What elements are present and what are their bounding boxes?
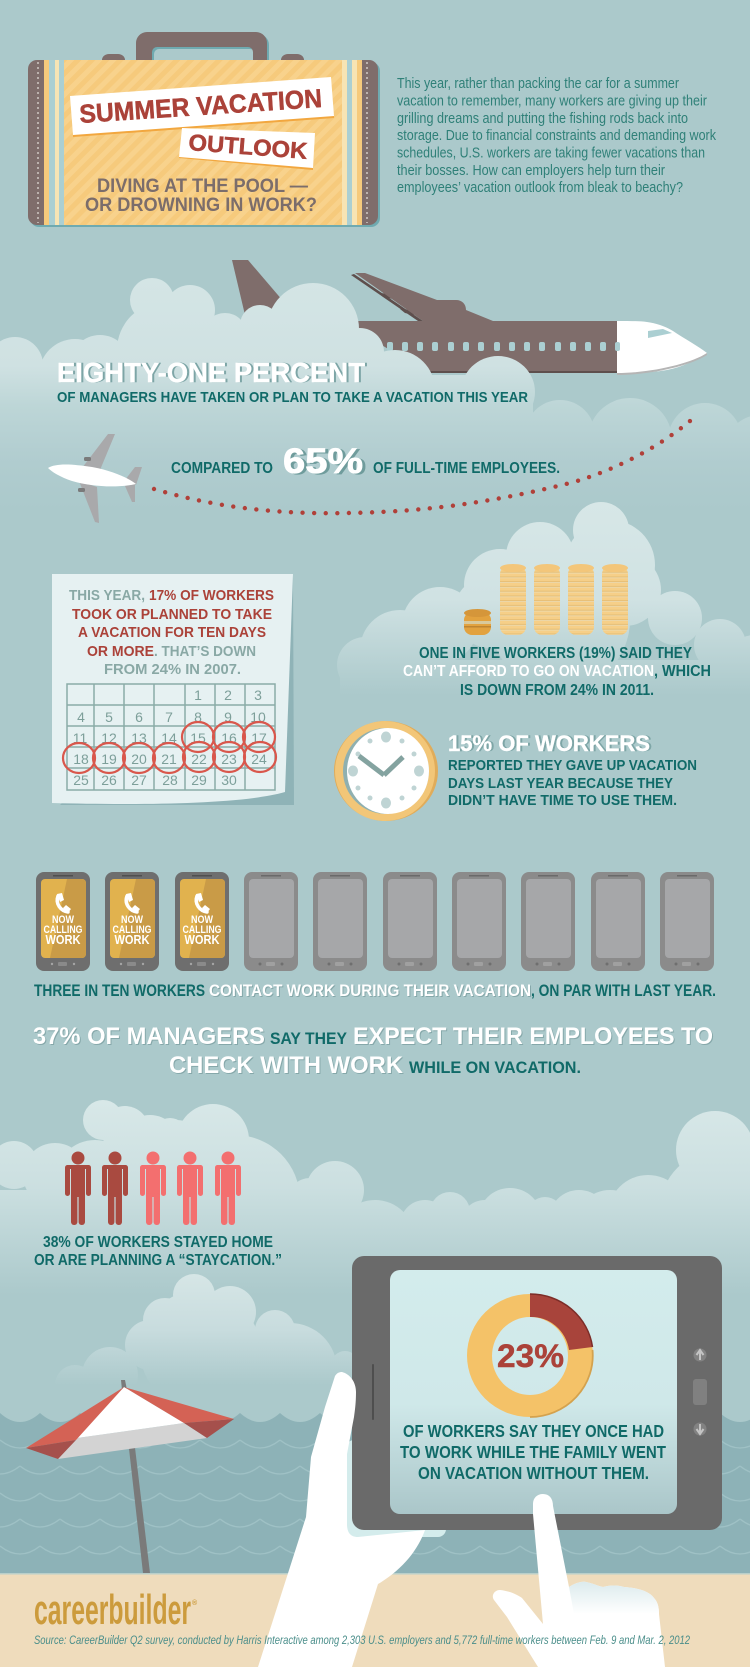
subheading: managers: OF MANAGERS HAVE TAKEN OR PLAN TO TAKE A VACATION THIS YEAR xyxy=(57,389,528,406)
calendar numbers: 3 xyxy=(254,687,262,703)
calendar numbers: 28 xyxy=(162,772,178,788)
intro paragraph: their bosses. How can employers help turn their xyxy=(397,163,665,179)
intro paragraph: vacation to remember, many workers are giving up their xyxy=(397,94,707,110)
phone: now calling work 2: CALLING xyxy=(112,924,152,936)
gray phones xyxy=(244,872,714,971)
text: 37% of managers: WHILE ON VACATION. xyxy=(409,1058,581,1077)
intro paragraph xyxy=(397,76,717,196)
tablet xyxy=(346,1256,722,1537)
calendar numbers: 29 xyxy=(191,772,207,788)
large airplane xyxy=(232,260,707,375)
phone: now calling work 2: NOW xyxy=(121,914,143,926)
calendar numbers: 25 xyxy=(73,772,89,788)
text: 15% of workers: 15% OF WORKERS xyxy=(448,731,650,756)
text: 15% of workers xyxy=(448,731,697,809)
calendar numbers: 16 xyxy=(221,730,237,746)
calendar numbers: 9 xyxy=(224,709,232,725)
heading: eighty-one percent: EIGHTY-ONE PERCENT xyxy=(57,357,365,388)
calendar numbers: 6 xyxy=(135,709,143,725)
intro paragraph: grilling dreams and putting the fishing rods back into xyxy=(397,111,688,127)
cloud: top banner xyxy=(0,278,750,530)
calendar numbers: 24 xyxy=(251,751,267,767)
text: three in ten workers: CONTACT WORK DURING THEIR VACATION xyxy=(209,982,531,1000)
phone: now calling work 2 xyxy=(105,872,159,971)
text: staycation: OR ARE PLANNING A “STAYCATION.” xyxy=(34,1252,282,1269)
calendar numbers: 5 xyxy=(105,709,113,725)
tablet text: TO WORK WHILE THE FAMILY WENT xyxy=(400,1442,666,1462)
comparison text: 65%: COMPARED TO xyxy=(171,460,273,477)
calendar numbers: 17 xyxy=(251,730,267,746)
comparison text: 65%: OF FULL-TIME EMPLOYEES. xyxy=(373,460,560,477)
calendar text: TOOK OR PLANNED TO TAKE xyxy=(72,606,272,623)
dark figures: 2 of 5 xyxy=(65,1152,128,1225)
dotted flight path xyxy=(154,421,690,513)
calendar numbers: 27 xyxy=(131,772,147,788)
cloud: behind coins xyxy=(337,502,750,700)
donut chart 23%: 23% xyxy=(497,1338,564,1374)
calendar numbers: 12 xyxy=(101,730,117,746)
tablet text: OF WORKERS SAY THEY ONCE HAD xyxy=(403,1421,664,1441)
subtitle: OR DROWNING IN WORK? xyxy=(85,195,317,216)
clock xyxy=(334,721,438,821)
calendar numbers: 13 xyxy=(131,730,147,746)
calendar text: . THAT’S DOWN xyxy=(154,643,256,660)
calendar numbers: 10 xyxy=(250,709,266,725)
small airplane xyxy=(48,434,142,523)
text: cannot afford vacation: CAN’T AFFORD TO GO ON VACATION xyxy=(403,663,654,680)
phone: now calling work 3: WORK xyxy=(184,932,220,947)
calendar text: THIS YEAR, xyxy=(69,587,145,604)
phone: now calling work 1 xyxy=(36,872,90,971)
calendar text: A VACATION FOR TEN DAYS xyxy=(78,624,266,641)
text: three in ten workers: , ON PAR WITH LAST YEAR. xyxy=(531,982,716,1000)
phone: now calling work 1: WORK xyxy=(46,932,81,947)
text: 15% of workers: REPORTED THEY GAVE UP VACATION xyxy=(448,758,697,774)
calendar numbers: 22 xyxy=(191,751,207,767)
subtitle xyxy=(85,176,317,216)
light figures: 3 of 5 xyxy=(140,1152,241,1225)
text: cannot afford vacation: , WHICH xyxy=(654,663,711,680)
sea xyxy=(0,1413,750,1580)
tablet text: ON VACATION WITHOUT THEM. xyxy=(418,1463,649,1483)
phone: now calling work 1: NOW xyxy=(52,914,74,926)
coin stacks xyxy=(464,564,628,635)
calendar numbers: 19 xyxy=(101,751,117,767)
title label: summer vacation: SUMMER VACATION xyxy=(78,83,323,129)
people icons xyxy=(65,1152,241,1225)
calendar numbers: 8 xyxy=(194,709,202,725)
intro paragraph: employees’ vacation outlook from bleak to beachy? xyxy=(397,180,683,196)
beach umbrella xyxy=(26,1380,234,1573)
text: 37% of managers xyxy=(33,1023,713,1079)
calendar numbers: 4 xyxy=(77,709,85,725)
calendar grid xyxy=(67,684,275,790)
text: 37% of managers: 37% OF MANAGERS xyxy=(33,1023,265,1050)
text: 15% of workers: DAYS LAST YEAR BECAUSE THEY xyxy=(448,776,673,792)
phone: now calling work 2: WORK xyxy=(114,932,150,947)
calendar text xyxy=(69,587,274,678)
calendar numbers xyxy=(73,687,267,788)
calendar numbers: 30 xyxy=(221,772,237,788)
title label: outlook: OUTLOOK xyxy=(188,129,309,164)
careerbuilder logo xyxy=(34,1586,198,1633)
calendar numbers: 20 xyxy=(131,751,147,767)
calendar numbers: 26 xyxy=(101,772,117,788)
text: three in ten workers: THREE IN TEN WORKERS xyxy=(34,982,205,1000)
phone: now calling work 3: CALLING xyxy=(182,924,222,936)
calendar text: FROM 24% IN 2007. xyxy=(104,661,241,678)
careerbuilder logo: careerbuilder xyxy=(34,1586,191,1633)
text: cannot afford vacation: IS DOWN FROM 24% IN 2011. xyxy=(460,682,654,699)
suitcase with title xyxy=(28,32,380,227)
calendar text: 17% OF WORKERS xyxy=(149,587,274,604)
phone: now calling work 3: NOW xyxy=(191,914,213,926)
phone: now calling work 3 xyxy=(175,872,229,971)
calendar numbers: 2 xyxy=(224,687,232,703)
careerbuilder logo: ® xyxy=(192,1599,198,1607)
phone row xyxy=(36,872,714,971)
intro paragraph: schedules, U.S. workers are taking fewer vacations than xyxy=(397,146,705,162)
comparison text: 65% xyxy=(171,442,560,481)
donut chart 23% xyxy=(467,1294,593,1417)
calendar numbers: 1 xyxy=(194,687,202,703)
calendar note xyxy=(52,574,294,805)
text: cannot afford vacation xyxy=(403,645,711,699)
calendar numbers: 21 xyxy=(161,751,177,767)
left hand holding tablet xyxy=(258,1372,425,1667)
circled vacation days xyxy=(63,722,276,773)
text: 37% of managers: EXPECT THEIR EMPLOYEES TO xyxy=(353,1023,713,1050)
calendar numbers: 7 xyxy=(165,709,173,725)
text: staycation xyxy=(34,1234,282,1269)
cloud: lower band xyxy=(0,1100,750,1305)
text: 37% of managers: SAY THEY xyxy=(270,1029,348,1048)
sand xyxy=(0,1573,750,1667)
calendar numbers: 23 xyxy=(221,751,237,767)
calendar text: OR MORE xyxy=(87,643,154,660)
calendar numbers: 14 xyxy=(161,730,177,746)
calendar numbers: 18 xyxy=(73,751,89,767)
text: 37% of managers: CHECK WITH WORK xyxy=(169,1052,404,1079)
calendar numbers: 15 xyxy=(190,730,206,746)
text: staycation: 38% OF WORKERS STAYED HOME xyxy=(43,1234,273,1251)
text: cannot afford vacation: ONE IN FIVE WORKERS (19%) SAID THEY xyxy=(419,645,693,662)
right hand tapping tablet xyxy=(493,1494,665,1667)
text: three in ten workers xyxy=(34,982,716,1000)
cloud: small beach cloud xyxy=(55,1274,360,1420)
calendar numbers: 11 xyxy=(73,730,87,746)
text: 15% of workers: DIDN’T HAVE TIME TO USE THEM. xyxy=(448,793,677,809)
subtitle: DIVING AT THE POOL — xyxy=(97,176,308,197)
tablet text xyxy=(400,1421,666,1483)
phone: now calling work 1: CALLING xyxy=(44,924,82,936)
intro paragraph: This year, rather than packing the car for a summer xyxy=(397,76,679,92)
comparison text: 65%: 65% xyxy=(283,442,363,481)
